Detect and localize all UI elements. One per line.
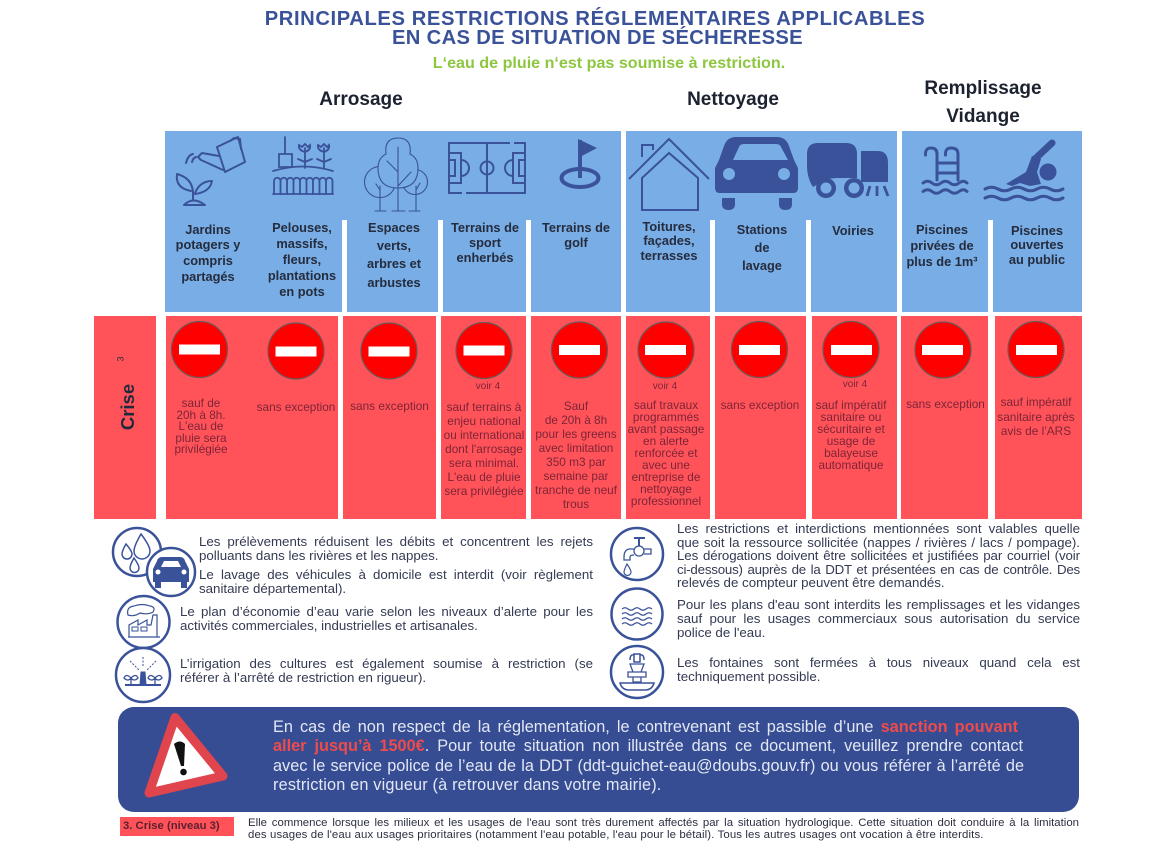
exception: Piscines privées: sans exception [906,397,985,411]
exception: Voiries [816,398,886,472]
icon: swimmer [985,143,1063,200]
label: Piscines ouvertes: au public [1009,252,1065,267]
label: Stations de lavage: lavage [742,258,782,273]
icon: watering can and plant [177,137,245,205]
legend: crisis level tag [120,817,234,836]
exception: Jardins: 20h à 8h. [176,408,226,422]
exception: Toitures [628,398,704,508]
label: Espaces verts: verts, [377,238,411,253]
label: Pelouses: en pots [279,284,325,299]
note: plan d'économie: activités commerciales, industrielles et artisanales. [180,618,478,633]
exception: Espaces verts: sans exception [350,399,429,413]
exception: Piscines ouvertes: sanitaire après [997,410,1075,424]
heading: Arrosage: Arrosage [319,89,403,110]
exception: Terrains de sport [444,400,524,498]
exception: Voiries: sauf impératif [816,398,886,412]
cell: Arrosage 1-2 [166,316,338,519]
icon: factory circle [118,596,170,648]
exception: Terrains de golf: semaine par [544,469,608,483]
label: Stations de lavage [737,222,787,273]
exception: Terrains de sport: ou international [444,428,524,442]
callout text: avec le service police de l’eau de la DDT (ddt-guichet-eau@doubs.gouv.fr) ou vous référer à l’arrêté de [273,757,1024,775]
label: Espaces verts: arbres et [367,256,421,271]
note: fontaines [677,655,1080,684]
cell: Toitures [626,316,710,519]
note: lavage: sanitaire départemental). [199,581,346,596]
note: restrictions [677,521,1080,590]
legend: crisis definition: des usages de l'eau aux usages prioritaires (notamment l'eau potable, l'eau pour le bétail). Tous les autres usages ont vocation à être interdits. [248,828,984,840]
exception: Toitures: avec une [642,458,690,472]
exception: Toitures: entreprise de [632,470,700,484]
exception: Jardins: pluie sera [175,431,227,445]
cell: Piscines ouvertes [995,316,1082,519]
heading: Remplissage Vidange [924,78,1042,127]
note: plans d'eau: police de l'eau. [677,625,765,640]
exception: Voiries: sanitaire ou [820,410,882,424]
exception: Terrains de golf: trous [563,497,589,511]
exception: Terrains de sport: dont l'arrosage [445,442,523,456]
label: Toitures: façades, [643,233,695,248]
title: PRINCIPALES RESTRICTIONS RÉGLEMENTAIRES APPLICABLES [265,8,925,30]
exception: Pelouses: sans exception [257,400,335,414]
exception: Terrains de sport: sauf terrains à [447,400,521,414]
note: plans d'eau [677,597,1080,640]
note: restrictions: relevés de compteur peuvent être demandés. [677,575,945,590]
legend: crisis definition [248,816,1079,840]
icon: garden and fence [273,137,333,194]
level number: 3 [116,356,126,362]
callout text: aller jusqu’à 1500€. Pour toute situation non illustrée dans ce document, veuillez prendre contact [273,737,1023,755]
heading: Nettoyage: Nettoyage [687,89,779,110]
exception: Terrains de golf: 350 m3 par [546,455,606,469]
label: Terrains de sport: enherbés [457,250,513,265]
note: lavage: Le lavage des véhicules à domicile est interdit (voir règlement [199,567,593,582]
label: Jardins: potagers y [176,237,240,252]
label: Terrains de sport: Terrains de [451,220,519,235]
heading: Remplissage Vidange: Remplissage [924,78,1042,99]
label: Piscines privées [906,222,978,269]
label: Stations de lavage: de [755,240,769,255]
icon: trees [364,138,428,211]
cell: Terrains de sport [441,316,526,519]
label: Voiries: Voiries [832,223,874,238]
label: Espaces verts: arbustes [367,275,421,290]
label: Pelouses [268,220,336,299]
exception: Terrains de golf: de 20h à 8h [545,413,607,427]
legend: crisis definition: Elle commence lorsque les milieux et les usages de l'eau sont très durement affectés par la situation hydrologique. Cette situation doit conduire à la limitation [248,816,1079,828]
exception: Jardins: L'eau de [179,419,223,433]
label: Toitures [640,219,697,263]
title: EN CAS DE SITUATION DE SÉCHERESSE [392,27,803,49]
label: Pelouses: Pelouses, [272,220,332,235]
note: voir 4 voiries: voir 4 [843,379,867,390]
exception: Voiries: usage de [827,434,875,448]
note: prélèvements [199,534,593,563]
exception: Toitures: sauf travaux [634,398,698,412]
note: voir 4 toitures: voir 4 [653,381,677,392]
label: Toitures: Toitures, [642,219,696,234]
panel: Remplissage categories [902,131,1082,312]
label: Piscines privées: plus de 1m³ [906,254,978,269]
exception: Terrains de golf [535,399,618,511]
exception: Voiries: balayeuse [824,446,878,460]
icon: sports field [449,143,525,193]
label: Jardins [176,222,240,284]
note: prélèvements: Les prélèvements réduisent les débits et concentrent les rejets [199,534,593,549]
exception: Toitures: avant passage [628,422,704,436]
icon: fountain circle [611,646,663,698]
label: Terrains de sport [451,220,519,265]
exception: Terrains de golf: tranche de neuf [535,483,617,497]
panel: Arrosage categories [165,131,621,312]
label: Espaces verts [367,220,421,290]
icon: house [629,139,709,210]
icon: water drops circle [113,528,161,576]
cell: Espaces verts [343,316,436,519]
sign: no entry 10 [1008,322,1064,378]
subtitle: L‘eau de pluie n‘est pas soumise à restriction. [433,54,785,72]
sign: no entry 5 [552,322,608,378]
note: irrigation: L’irrigation des cultures est également soumise à restriction (se [180,656,593,671]
cell: Voiries [812,316,897,519]
callout text: En cas de non respect de la réglementation, le contrevenant est passible d’une sanction pouvant [273,718,1018,736]
note: restrictions: que soit la ressource sollicitée (nappes / rivières / lacs / pompage). [677,534,1080,550]
icon: warning triangle [144,713,228,798]
note: plan d'économie: Le plan d’économie d’eau varie selon les niveaux d’alerte pour les [180,604,593,619]
label: Piscines ouvertes [1009,222,1065,267]
note: restrictions: Les dérogations doivent être sollicitées et justifiées par courriel (voir [677,548,1080,563]
legend: crisis level tag: 3. Crise (niveau 3) [123,820,220,832]
icon: golf flag [562,139,598,187]
cell: Piscines privées [901,316,988,519]
note: plan d'économie [180,604,593,633]
label: Jardins: Jardins [185,222,231,236]
sign: no entry 9 [915,322,971,378]
label: Piscines ouvertes: ouvertes [1010,237,1064,252]
note: prélèvements: polluants dans les rivières et les nappes. [199,548,438,563]
note: plans d'eau: Pour les plans d'eau sont interdits les remplissages et les vidanges [677,597,1080,612]
note: lavage [199,567,593,596]
exception: Terrains de sport: sera minimal. [449,456,519,470]
exception: Toitures: renforcée et [635,446,697,460]
cell: Stations de lavage [715,316,806,519]
note: fontaines: techniquement possible. [677,669,820,684]
icon: pool ladder [923,148,967,193]
icon: water waves circle [612,588,662,640]
level name: Crise [117,384,138,430]
label: Jardins: partagés [181,269,235,284]
note: fontaines: Les fontaines sont fermées à tous niveaux quand cela est [677,655,1080,670]
label: Terrains de golf: Terrains de [542,220,610,234]
note: irrigation [180,656,593,685]
exception: Terrains de golf: Sauf [564,399,588,413]
callout: sanction banner [118,707,1079,812]
exception: Terrains de golf: pour les greens [535,427,617,441]
exception: Stations: sans exception [721,398,799,412]
label: Piscines privées: privées de [910,238,974,253]
icon: irrigation circle [116,648,170,702]
sign: no entry 4 [456,322,512,378]
exception: Piscines ouvertes: avis de l’ARS [1001,424,1071,438]
label: Terrains de golf [542,220,610,250]
label: Jardins: compris [183,253,233,268]
icon: car [715,137,798,210]
label: Espaces verts: Espaces [368,220,420,235]
label: Terrains de sport: sport [469,235,501,250]
exception: Voiries: sécuritaire et [817,422,885,436]
exception: Toitures: en alerte [643,434,689,448]
note: restrictions: ci-dessous) auprès de la DDT et présentées en cas de contrôle. Des [677,562,1080,576]
exception: Voiries: automatique [819,458,883,472]
label: Piscines privées: Piscines [916,222,968,237]
icon: street sweeper [807,143,888,198]
exception: Jardins: sauf de [182,396,220,410]
exception: Toitures: programmés [633,410,699,424]
note: restrictions: Les restrictions et interdictions mentionnées sont valables quelle [677,521,1080,536]
note: voir 4 terrains: voir 4 [476,381,500,392]
note: irrigation: référer à l’arrêté de restriction en rigueur). [180,670,426,685]
heading: Remplissage Vidange: Vidange [946,106,1020,127]
cell: Terrains de golf [531,316,621,519]
label: Pelouses: fleurs, [283,252,321,267]
title [265,7,925,49]
exception: Piscines ouvertes [997,395,1075,438]
icon: car circle [147,548,195,596]
panel: Nettoyage categories [626,131,897,312]
row header: Crise [94,316,156,519]
exception: Jardins: privilégiée [174,442,228,456]
sign: no entry 8 [823,322,879,378]
sign: no entry 7 [732,322,788,378]
callout text [273,718,1024,794]
exception: Terrains de sport: enjeu national [447,414,521,428]
exception: Terrains de sport: L'eau de pluie [447,470,521,484]
callout text: restriction en vigueur (à retrouver dans votre mairie). [273,776,662,794]
sign: no entry 6 [638,322,694,378]
exception: Terrains de golf: avec limitation [539,441,613,455]
label: Pelouses: plantations [268,268,336,283]
label: Pelouses: massifs, [276,236,328,251]
label: Toitures: terrasses [641,248,697,263]
exception: Jardins [174,396,228,456]
exception: Toitures: professionnel [631,494,701,508]
label: Terrains de golf: golf [564,234,588,250]
label: Stations de lavage: Stations [737,222,787,237]
icon: tap circle [611,528,663,580]
label: Piscines ouvertes: Piscines [1011,222,1063,238]
exception: Terrains de sport: sera privilégiée [444,484,524,498]
sign: no entry 3 [361,323,417,379]
note: plans d'eau: sauf pour les usages commerciaux sous autorisation du service [677,611,1080,626]
sign: no entry 1 [172,322,228,378]
sign: no entry 2 [268,323,324,379]
exception: Piscines ouvertes: sauf impératif [1001,395,1071,409]
exception: Toitures: nettoyage [640,482,692,496]
